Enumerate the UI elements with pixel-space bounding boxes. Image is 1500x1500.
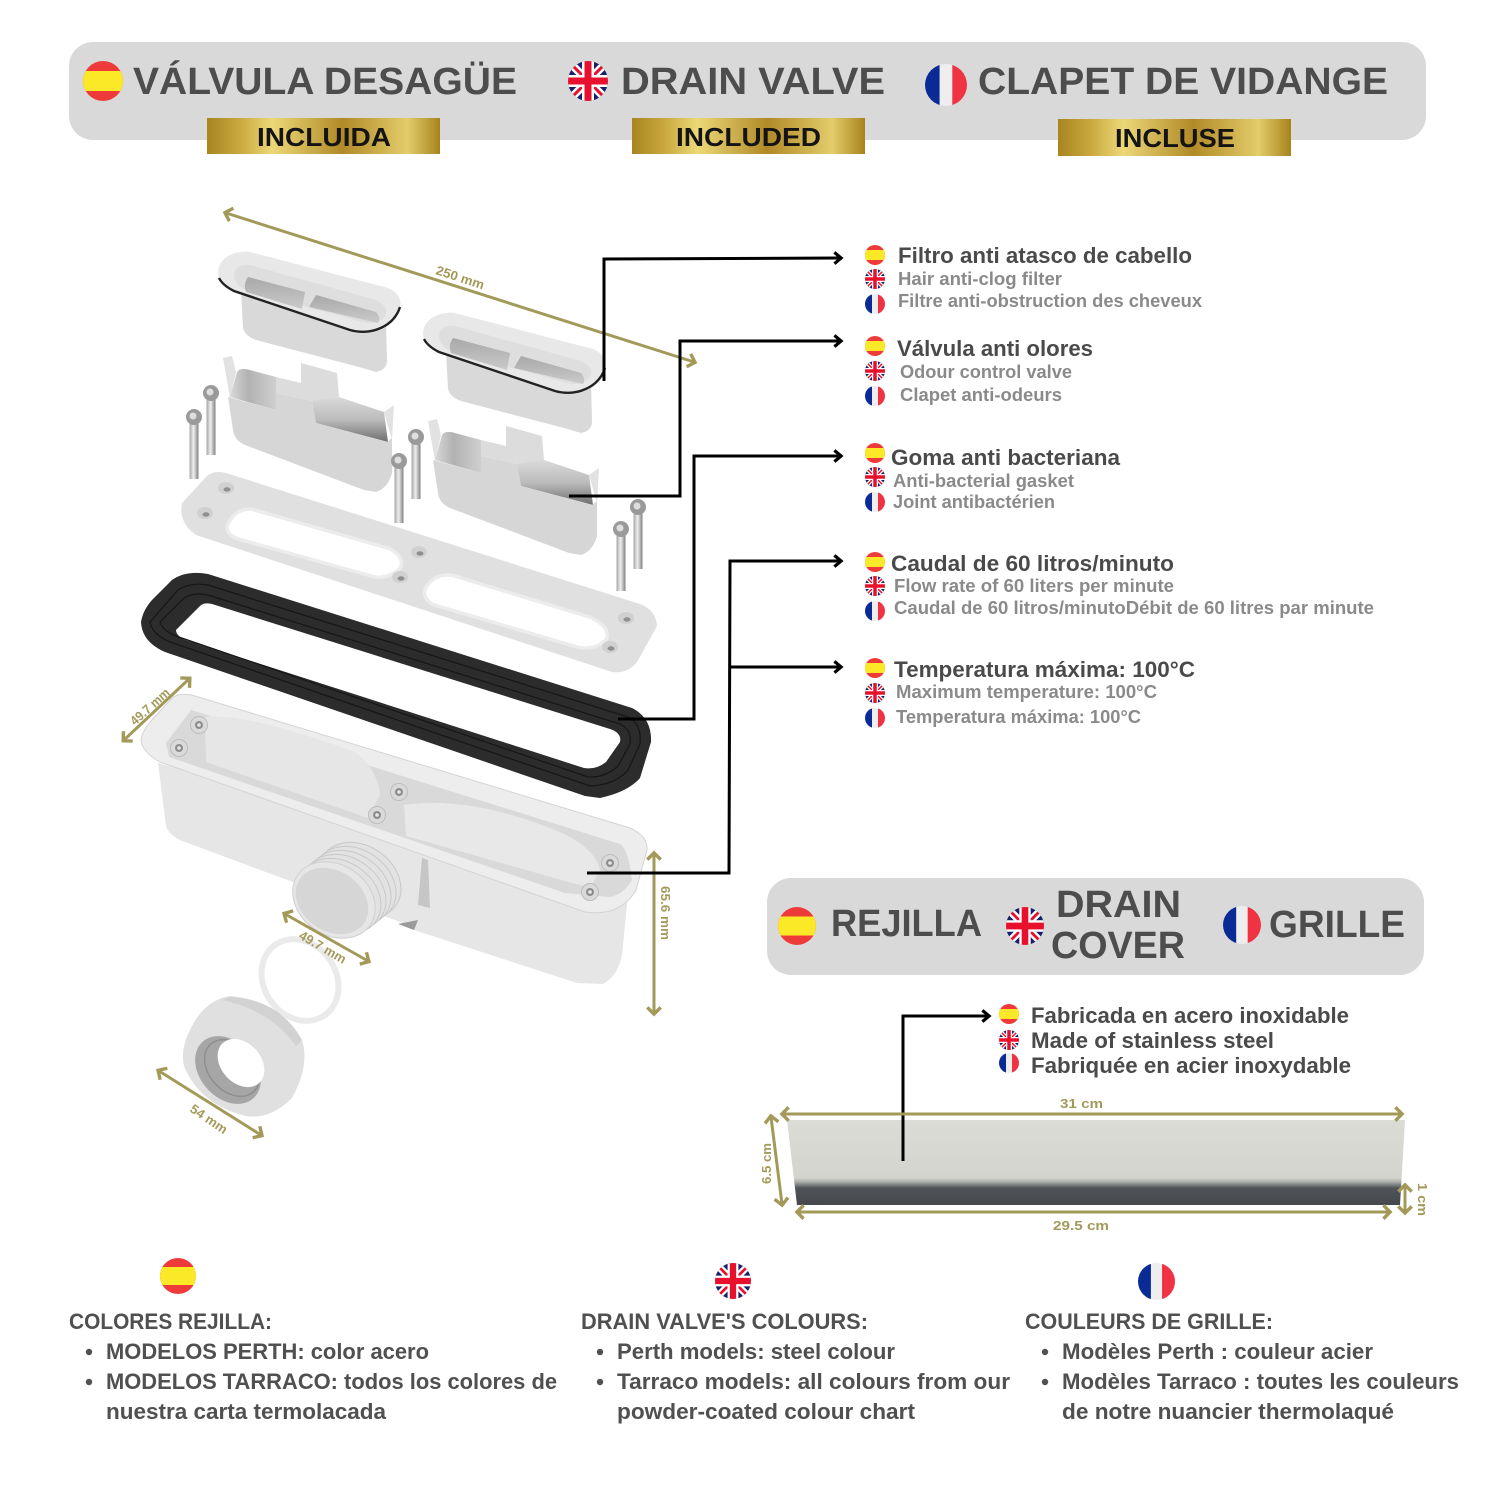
- text block: English colours: powder-coated colour chart: [617, 1399, 916, 1424]
- badge: incluida: INCLUIDA: [257, 122, 391, 152]
- text block: temperature: Maximum temperature: 100°C: [896, 682, 1157, 702]
- text block: odour valve: Clapet anti-odeurs: [900, 385, 1062, 405]
- text block: stainless steel: Fabriquée en acier inoxydable: [1031, 1053, 1351, 1078]
- text block: odour valve: Odour control valve: [900, 362, 1072, 382]
- text block: English colours: DRAIN VALVE'S COLOURS:: [581, 1309, 868, 1334]
- text block: temperature: Temperatura máxima: 100°C: [894, 657, 1195, 682]
- arrow: hair filter callout: [604, 258, 840, 381]
- text block: stainless steel: Fabricada en acero inoxidable: [1031, 1003, 1349, 1028]
- dimension: 31 cm: 31 cm: [1060, 1096, 1103, 1111]
- text block: Spanish colours: MODELOS TARRACO: todos los colores de: [106, 1369, 557, 1394]
- part: sealing ring: [246, 924, 354, 1036]
- diagram: exploded drain valve: [141, 252, 657, 1117]
- dimension: 65.6 mm height: 65.6 mm: [658, 886, 673, 940]
- text block: French colours: [1025, 1263, 1459, 1424]
- arrow: odour valve callout: [569, 341, 840, 496]
- text block: English colours: [581, 1263, 1010, 1424]
- icon: France flag: [925, 64, 967, 106]
- part: hair filter right: [423, 313, 606, 433]
- text block: hair filter: Filtro anti atasco de cabello: [898, 243, 1192, 268]
- dimension: 29.5 cm: 29.5 cm: [1053, 1218, 1109, 1233]
- badge: incluse: [1058, 119, 1291, 156]
- arrow: flow rate callout: [587, 561, 840, 873]
- text block: flow rate: Caudal de 60 litros/minutoDébit de 60 litres par minute: [894, 598, 1374, 618]
- icon: UK flag: [568, 61, 608, 101]
- text block: gasket: Joint antibactérien: [893, 492, 1055, 512]
- part: black anti-bacterial gasket: [141, 573, 651, 798]
- dimension: 54 mm nut: [159, 1071, 261, 1137]
- text block: temperature: [865, 657, 1195, 728]
- text block: gasket: Goma anti bacteriana: [891, 445, 1121, 470]
- text block: temperature: Temperatura máxima: 100°C: [896, 707, 1141, 727]
- heading: drain cover: [1051, 884, 1185, 967]
- dimension: 49.7 mm spout: 49.7 mm: [296, 928, 349, 967]
- text block: hair filter: Hair anti-clog filter: [898, 269, 1062, 289]
- part: odour valve left: [223, 356, 394, 492]
- text block: English colours: Tarraco models: all colours from our: [617, 1369, 1010, 1394]
- text block: flow rate: Caudal de 60 litros/minuto: [891, 551, 1174, 576]
- badge: included: INCLUDED: [676, 122, 821, 152]
- text block: gasket: Anti-bacterial gasket: [893, 471, 1074, 491]
- part: mounting plate: [181, 472, 657, 672]
- dimension: 49.7 mm width: [124, 679, 189, 740]
- text block: French colours: Modèles Perth : couleur acier: [1062, 1339, 1373, 1364]
- heading: rejilla: REJILLA: [831, 903, 982, 945]
- text block: hair filter: [865, 243, 1202, 314]
- text block: flow rate: Flow rate of 60 liters per minute: [894, 576, 1174, 596]
- icon: Spain flag: [778, 907, 816, 945]
- text block: stainless steel: [999, 1003, 1351, 1078]
- text block: French colours: Modèles Tarraco : toutes les couleurs: [1062, 1369, 1459, 1394]
- photo: drain cover grille: [787, 1120, 1405, 1205]
- text block: Spanish colours: COLORES REJILLA:: [69, 1309, 272, 1334]
- dimension: 250 mm: [226, 213, 694, 362]
- part: hair filter left: [218, 252, 400, 372]
- panel: drain cover banner: [767, 878, 1424, 975]
- panel: valve title banner: [69, 42, 1426, 140]
- arrow: stainless steel callout: [903, 1016, 988, 1161]
- dimension: 49.7 mm width: 49.7 mm: [127, 685, 173, 728]
- part: threaded nut: [182, 996, 304, 1117]
- dimension: 1 cm: 1 cm: [1415, 1183, 1430, 1216]
- dimension: 49.7 mm spout: [285, 914, 368, 967]
- text block: odour valve: [865, 336, 1093, 406]
- text block: Spanish colours: MODELOS PERTH: color acero: [106, 1339, 429, 1364]
- badge: included: [632, 118, 865, 154]
- dimension: 1 cm: [1405, 1183, 1430, 1216]
- text block: Spanish colours: [69, 1258, 557, 1424]
- text block: Spanish colours: nuestra carta termolacada: [106, 1399, 387, 1424]
- heading: French title: CLAPET DE VIDANGE: [978, 61, 1388, 103]
- heading: drain cover: DRAIN: [1056, 884, 1181, 926]
- heading: Spanish title: VÁLVULA DESAGÜE: [133, 59, 517, 103]
- dimension: 54 mm nut: 54 mm: [187, 1101, 231, 1137]
- arrow: gasket callout: [618, 456, 840, 719]
- text block: French colours: COULEURS DE GRILLE:: [1025, 1309, 1273, 1334]
- badge: incluse: INCLUSE: [1115, 123, 1235, 153]
- text block: flow rate: [865, 551, 1374, 621]
- arrow: temperature callout: [730, 666, 840, 668]
- part: odour valve right: [428, 419, 599, 555]
- text block: French colours: de notre nuancier thermolaqué: [1062, 1399, 1394, 1424]
- icon: UK flag: [1006, 907, 1044, 945]
- icon: France flag: [1223, 906, 1261, 944]
- text block: English colours: Perth models: steel colour: [617, 1339, 895, 1364]
- dimension: 6.5 cm: [759, 1117, 782, 1204]
- icon: Spain flag: [83, 61, 123, 101]
- part: screws: [186, 385, 646, 591]
- text block: stainless steel: Made of stainless steel: [1031, 1028, 1274, 1053]
- dimension: 6.5 cm: 6.5 cm: [759, 1143, 774, 1184]
- text block: odour valve: Válvula anti olores: [897, 336, 1093, 361]
- heading: English title: DRAIN VALVE: [621, 61, 885, 103]
- dimension: 250 mm: 250 mm: [434, 263, 486, 292]
- text block: gasket: [865, 443, 1121, 512]
- part: drain housing: [141, 694, 647, 984]
- heading: grille: GRILLE: [1269, 904, 1405, 946]
- heading: drain cover: COVER: [1051, 925, 1185, 967]
- badge: incluida: [207, 118, 440, 154]
- text block: hair filter: Filtre anti-obstruction des cheveux: [898, 291, 1202, 311]
